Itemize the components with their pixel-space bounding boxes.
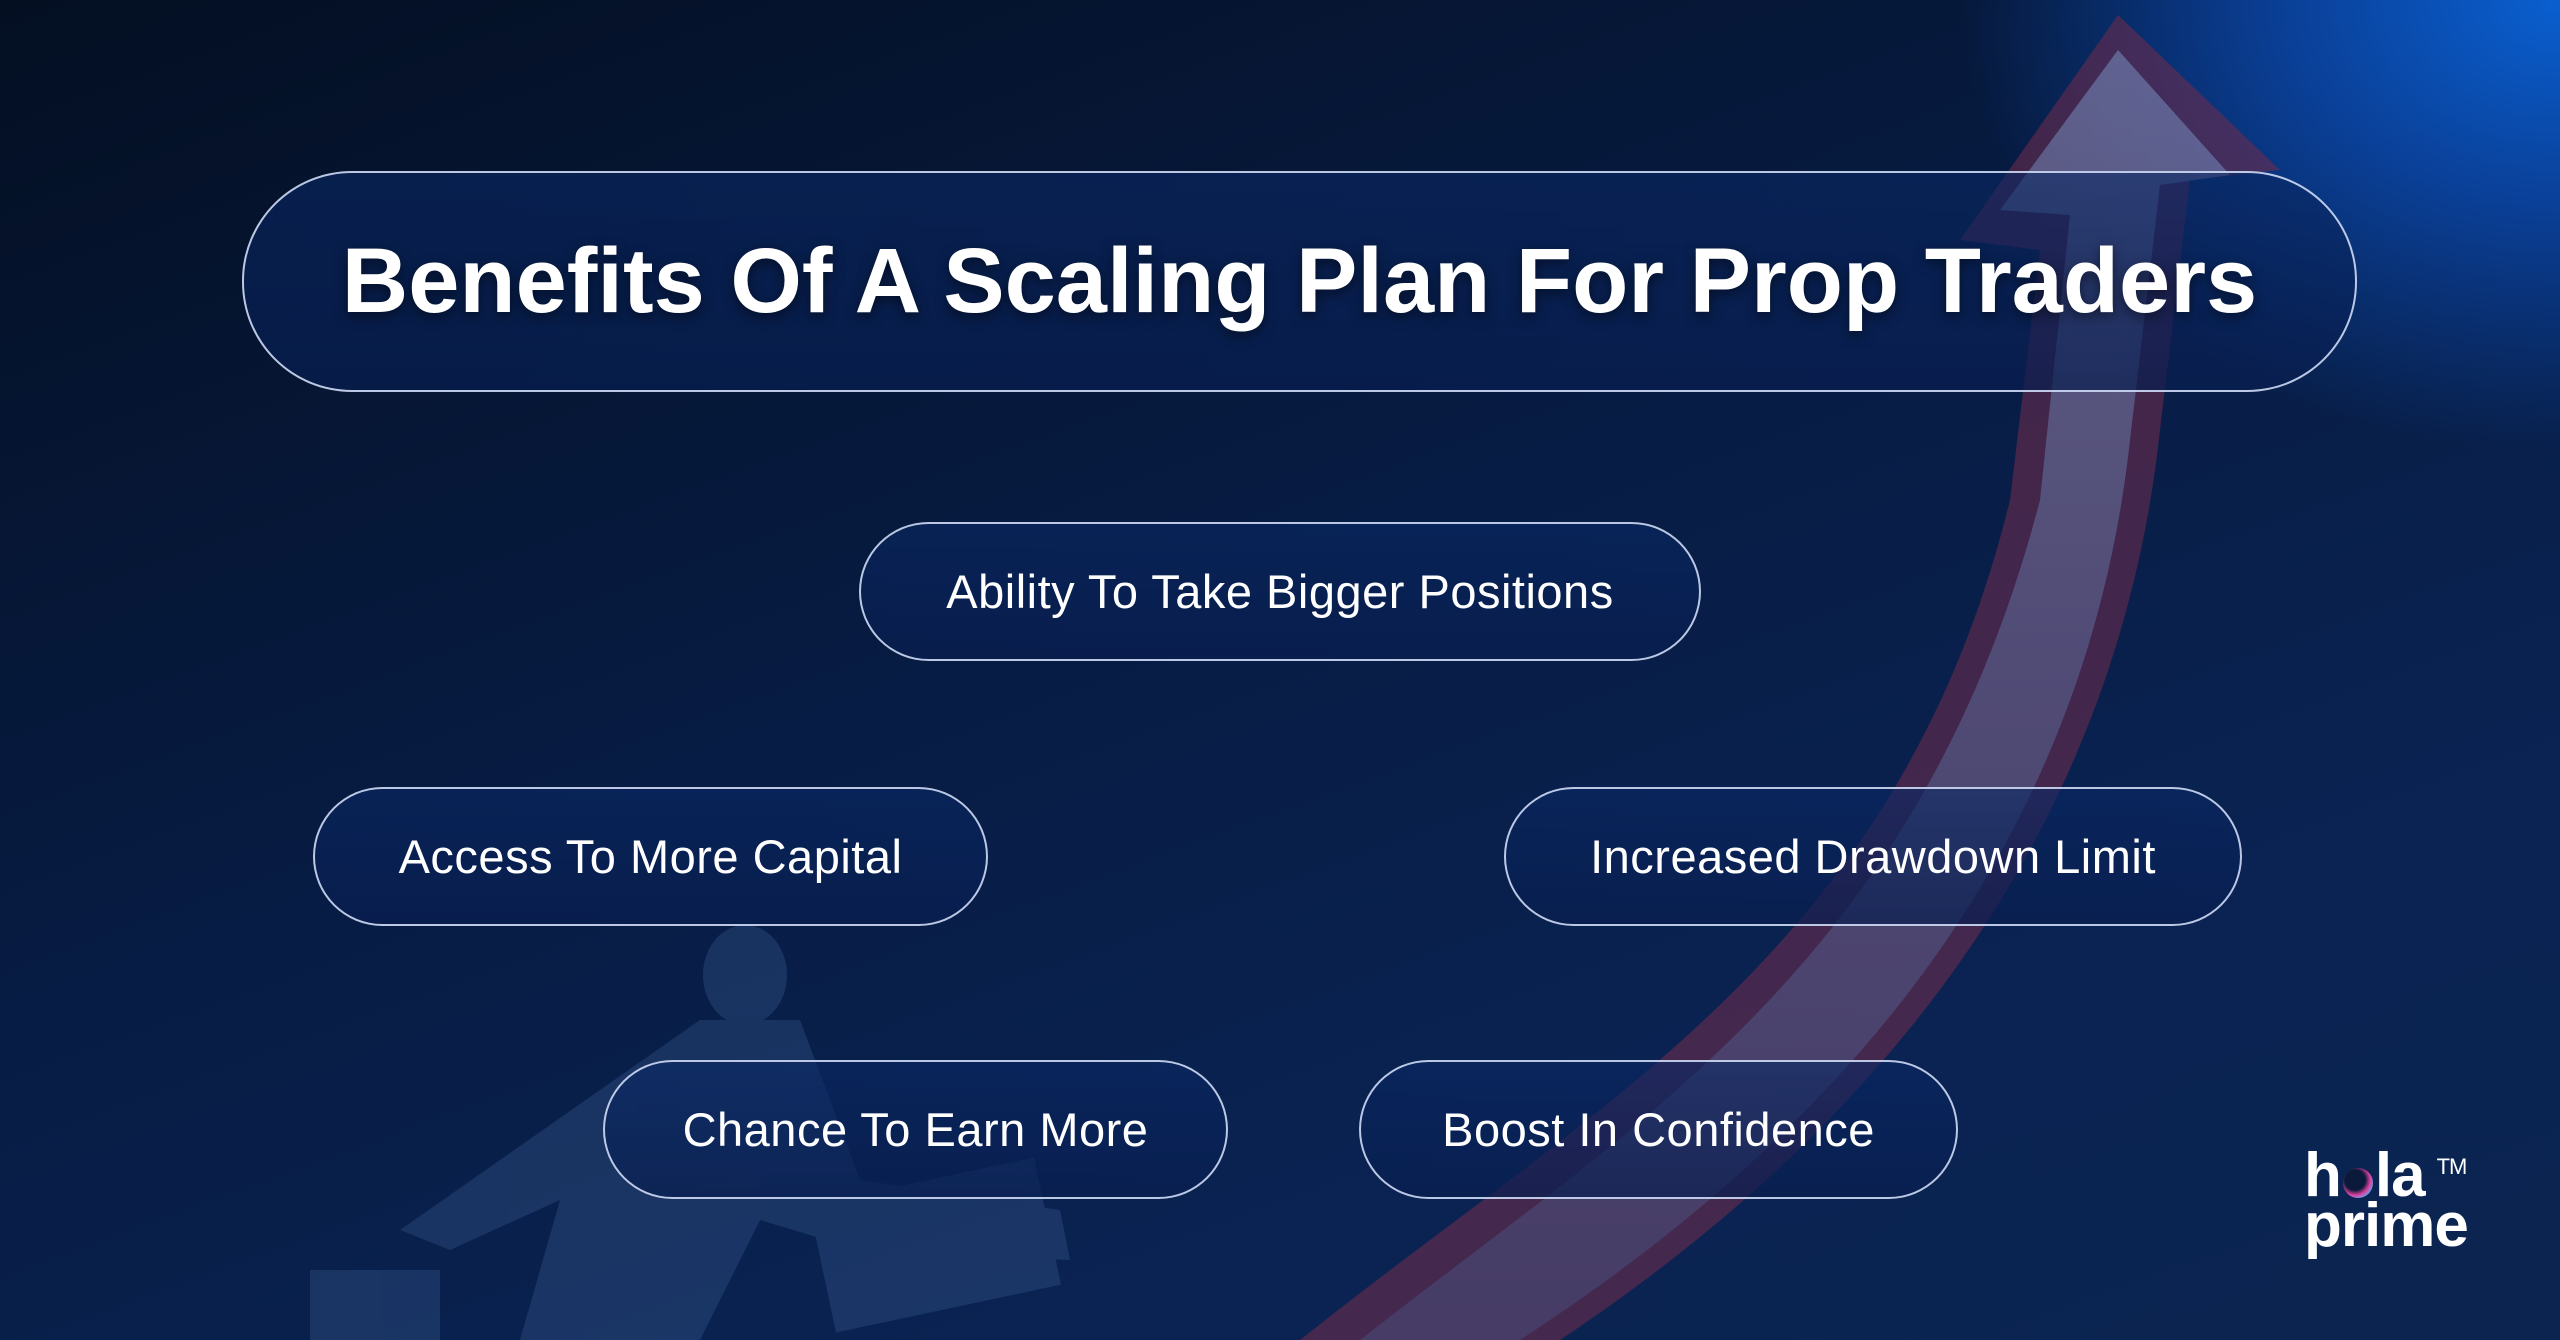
- pill: drawdown: [1504, 787, 2242, 926]
- logo: h la TM: [2304, 1141, 2466, 1210]
- logo: prime: [2304, 1191, 2468, 1260]
- pill: earn: Chance To Earn More: [683, 1103, 1148, 1156]
- title: [242, 171, 2357, 392]
- logo: [2304, 1141, 2468, 1260]
- pill: confidence: Boost In Confidence: [1442, 1103, 1875, 1156]
- pill: earn: [603, 1060, 1228, 1199]
- pill: confidence: [1359, 1060, 1958, 1199]
- pill: access: Access To More Capital: [399, 830, 902, 883]
- pill: ability: [859, 522, 1701, 661]
- pill: access: [313, 787, 988, 926]
- pill: drawdown: Increased Drawdown Limit: [1590, 830, 2156, 883]
- pill: ability: Ability To Take Bigger Positions: [946, 565, 1614, 618]
- title: Benefits Of A Scaling Plan For Prop Traders: [342, 230, 2257, 332]
